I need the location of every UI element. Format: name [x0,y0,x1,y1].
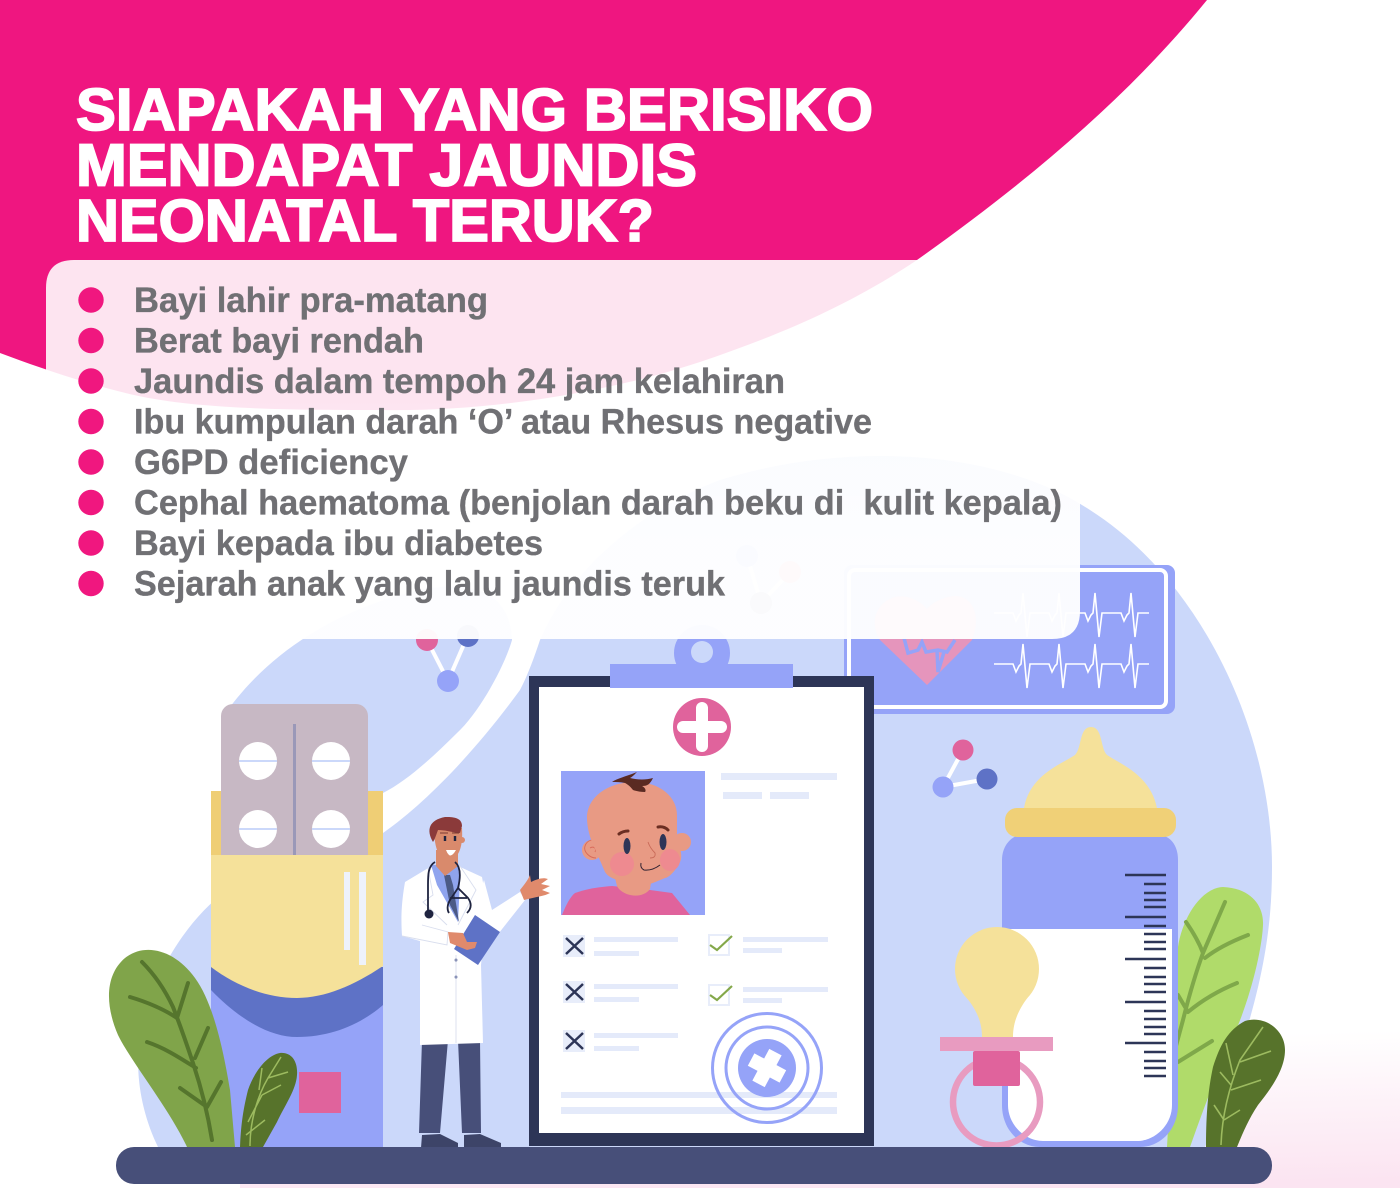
icon: medical cross [673,698,731,756]
clipboard [529,664,874,1146]
head [434,828,462,862]
face [445,836,455,841]
clipboard clip top [674,625,730,681]
risk factor list: Bayi lahir pra-matang [134,281,488,320]
risk factor list: Jaundis dalam tempoh 24 jam kelahiran [134,362,785,401]
clipboard held [454,915,500,965]
coat buttons [454,960,458,977]
checklist crosses [563,935,585,1052]
title: NEONATAL TERUK? [76,188,654,254]
blister pack [221,704,368,874]
stamp [712,1014,822,1122]
heart vessels [904,638,955,672]
scale ticks [1125,875,1166,1076]
lab coat [401,866,487,1045]
pacifier [940,927,1053,1146]
background: lavender blob [138,456,1272,1147]
shelf [116,1147,1272,1184]
leaf: right small [1206,1020,1285,1147]
risk factor bullets [78,287,104,596]
leaf: left large [109,950,235,1147]
risk factor list: Berat bayi rendah [134,322,424,360]
trousers [419,1040,481,1133]
hair [429,817,462,842]
ecg line: upper [994,593,1149,637]
shirt and tie [431,865,460,922]
risk factor list: Bayi kepada ibu diabetes [134,524,543,563]
icon: heart [875,596,976,685]
doctor [401,817,550,1148]
pill box back [211,791,383,856]
molecule: upper left [416,625,479,692]
title: SIAPAKAH YANG BERISIKO [76,77,873,143]
risk factor list: G6PD deficiency [134,443,409,482]
pill box front [211,855,383,1147]
risk factor list [134,281,1062,604]
stethoscope [428,862,471,913]
risk factor list: Ibu kumpulan darah ‘O’ atau Rhesus negative [134,402,872,442]
heart monitor [844,565,1175,714]
list panel [46,260,1080,639]
risk factor list: Cephal haematoma (benjolan darah beku di kulit kepala) [134,484,1062,522]
hand raised [520,875,550,900]
arm right raised [472,880,525,938]
checklist ticks [709,935,732,1005]
molecule: right [932,740,998,798]
ecg line: lower [994,644,1149,688]
title: MENDAPAT JAUNDIS [76,132,697,198]
risk factor list: Sejarah anak yang lalu jaundis teruk [134,564,726,604]
shoes [421,1134,501,1148]
neck [436,850,458,876]
background: bottom pink wash [240,1030,1400,1188]
leaf: right large [1167,887,1263,1147]
hand on clipboard [448,932,477,950]
molecule: faded behind panel [736,545,801,614]
background: pink header blob [0,0,1207,410]
baby photo [561,771,705,915]
leaf: left small [240,1053,297,1147]
title [76,77,873,254]
text placeholder lines [561,773,837,1114]
baby bottle [1002,727,1178,1147]
